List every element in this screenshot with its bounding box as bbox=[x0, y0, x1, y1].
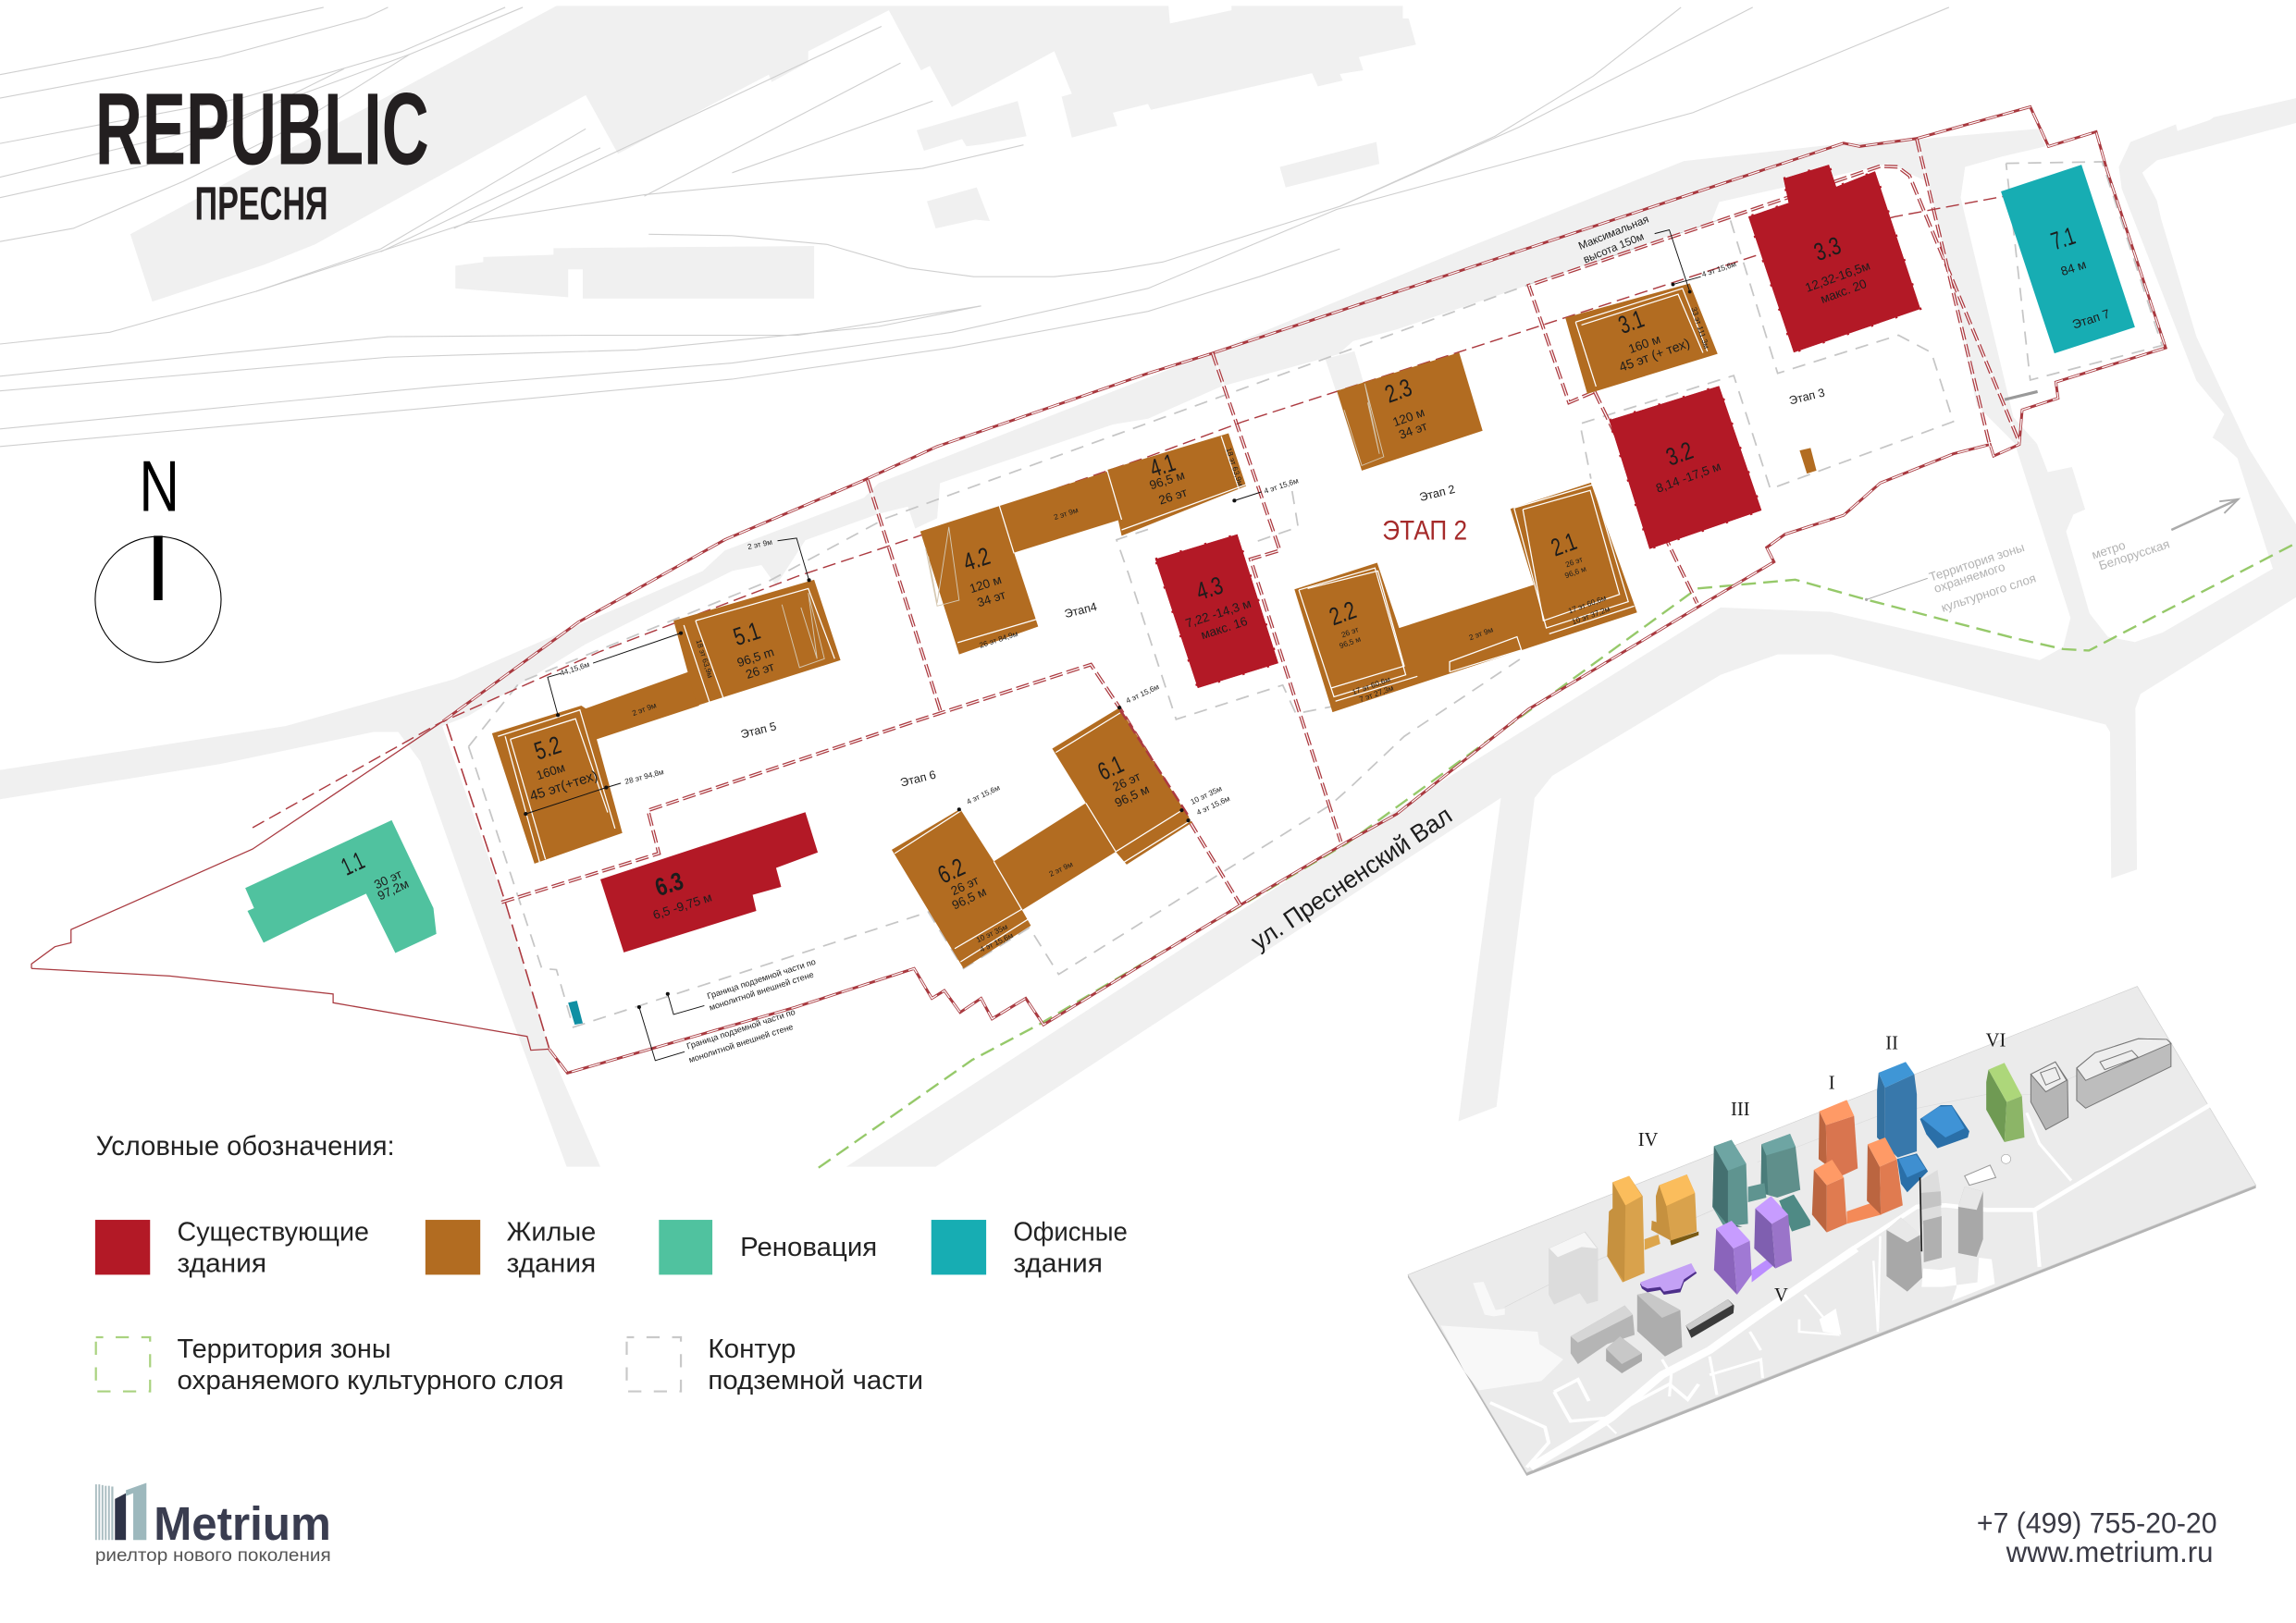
building 5.1: 18 эт 63,9м bbox=[694, 638, 714, 680]
building 3.3: 3.3 bbox=[1810, 231, 1845, 266]
dimension leaders and labels: Граница подземной части по bbox=[685, 1007, 796, 1051]
north compass: N bbox=[139, 447, 179, 526]
buildings 2.1 and 2.2 with connector: 2.1 bbox=[1548, 527, 1580, 562]
site boundary bbox=[31, 107, 2166, 1073]
building 5.2 with connector: 2 эт 9м bbox=[631, 701, 658, 718]
stage labels bbox=[739, 386, 1826, 790]
dimension leaders and labels: 4 эт 15,6м bbox=[1195, 794, 1231, 817]
stage labels: Этап4 bbox=[1063, 600, 1098, 621]
background: roads and surrounding buildings bbox=[0, 6, 2296, 1167]
building 3.3: 12,32-16,5м bbox=[1803, 259, 1872, 295]
legend: Реновация bbox=[740, 1233, 877, 1262]
dimension leaders and labels: монолитной внешней стене bbox=[708, 970, 815, 1013]
building 7.1 office: 84 м bbox=[2059, 257, 2088, 278]
building 4.2 with connector: 4.2 bbox=[960, 542, 994, 576]
railway lines bbox=[0, 7, 1949, 447]
model west part: roads and towers IV, III, I, V bbox=[1440, 1100, 1903, 1468]
dimension leaders and labels bbox=[524, 214, 1737, 1064]
buildings 2.1 and 2.2 with connector: 17 эт 60,6м bbox=[1567, 594, 1608, 615]
buildings 6.1 and 6.2 with connector: 10 эт 35м bbox=[975, 923, 1009, 944]
building 2.3: 2.3 bbox=[1381, 374, 1415, 409]
building 4.3: макс. 16 bbox=[1199, 614, 1249, 642]
building 3.2: 8,14 -17,5 м bbox=[1654, 459, 1722, 496]
dimension leaders and labels: высота 150м bbox=[1582, 230, 1646, 265]
stage division lines bbox=[253, 139, 2019, 904]
building 3.1: 45 эт (+ тех) bbox=[1617, 336, 1692, 375]
building 2.3: 34 эт bbox=[1397, 419, 1429, 442]
building 2.3 bbox=[1337, 352, 1483, 471]
logo: Metrium bbox=[95, 1483, 331, 1566]
buildings 6.1 and 6.2 with connector bbox=[892, 707, 1192, 968]
contact details: +7 (499) 755-20-20 bbox=[1977, 1506, 2217, 1539]
stage labels: Этап 6 bbox=[899, 768, 937, 790]
building 1.1: renovation: 30 эт bbox=[372, 867, 404, 891]
buildings 6.1 and 6.2 with connector: 96,5 м bbox=[950, 884, 988, 913]
model phase numerals bbox=[1638, 1030, 2006, 1306]
metro direction arrow bbox=[2090, 499, 2239, 572]
legend: Контур bbox=[708, 1334, 796, 1364]
building 7.1 office bbox=[2001, 165, 2135, 353]
building 3.1: 160 м bbox=[1626, 332, 1662, 356]
buildings 6.1 and 6.2 with connector: 4 эт 15,6м bbox=[979, 931, 1015, 954]
tower group III bbox=[1712, 1134, 1810, 1232]
building 3.2: 3.2 bbox=[1662, 436, 1697, 472]
stage labels: Этап 5 bbox=[739, 719, 778, 741]
logo: Republic Presnya: REPUBLIC bbox=[95, 72, 429, 186]
dimension leaders and labels: Максимальная bbox=[1576, 214, 1650, 252]
cultural layer annotation: культурного слоя bbox=[1940, 571, 2038, 615]
model phase numerals: I bbox=[1829, 1073, 1835, 1093]
building 3.1: 3.1 bbox=[1615, 305, 1648, 339]
building 4.2 with connector bbox=[920, 472, 1122, 655]
buildings 2.1 and 2.2 with connector: 7 эт 27,3м bbox=[1358, 683, 1395, 704]
dimension leaders and labels: 28 эт 94,8м bbox=[623, 768, 665, 786]
legend: подземной части bbox=[708, 1366, 923, 1396]
tower group V bbox=[1714, 1196, 1792, 1295]
dimension leaders and labels: 44,15,6м bbox=[559, 660, 591, 678]
tower group I bbox=[1812, 1100, 1903, 1233]
model phase numerals: IV bbox=[1638, 1130, 1659, 1150]
building 4.2 with connector: 26 эт 84,9м bbox=[979, 630, 1019, 650]
logo: Republic Presnya: ПРЕСНЯ bbox=[195, 177, 328, 229]
stage labels: Этап 2 bbox=[1418, 483, 1456, 504]
dimension leaders and labels: 4 эт 15,6м bbox=[966, 783, 1002, 806]
building 5.2 with connector bbox=[492, 672, 699, 864]
legend: Офисные bbox=[1013, 1217, 1128, 1247]
stage 2 heading: ЭТАП 2 bbox=[1382, 516, 1467, 547]
buildings 6.1 and 6.2 with connector: 6.2 bbox=[933, 853, 969, 889]
building 4.1: 26 эт bbox=[1157, 486, 1189, 508]
legend: здания bbox=[507, 1249, 596, 1279]
model east part: roads, tower II, VI and neighbours bbox=[1758, 1039, 2210, 1329]
dimension leaders and labels: 4 эт 15,6м bbox=[1125, 682, 1161, 706]
metro direction arrow: метро bbox=[2090, 538, 2127, 562]
buildings 2.1 and 2.2 with connector: 26 эт bbox=[1564, 555, 1584, 569]
stage labels: Этап 3 bbox=[1788, 386, 1826, 408]
model phase numerals: II bbox=[1885, 1034, 1898, 1054]
building 4.1: 18 эт 63,9м bbox=[1224, 447, 1244, 487]
dimension leaders and labels: Граница подземной части по bbox=[706, 957, 817, 1001]
dimension leaders and labels: монолитной внешней стене bbox=[687, 1022, 795, 1064]
buildings 6.1 and 6.2 with connector: 26 эт bbox=[1110, 769, 1142, 794]
buildings 2.1 and 2.2 with connector: 96,6 м bbox=[1563, 564, 1587, 580]
building 4.3: 4.3 bbox=[1192, 572, 1227, 606]
building 4.1: 4.1 bbox=[1146, 449, 1179, 483]
building 3.1 bbox=[1565, 283, 1718, 394]
legend: Территория зоны bbox=[178, 1334, 391, 1364]
logo: Metrium: риелтор нового поколения bbox=[95, 1545, 331, 1566]
building 3.1: 33 эт 111,3м bbox=[1689, 306, 1710, 350]
building 4.2 with connector: 34 эт bbox=[975, 587, 1007, 609]
building 7.1 office: Этап 7 bbox=[2070, 307, 2112, 332]
dimension leaders and labels: 10 эт 35м bbox=[1190, 784, 1224, 806]
building 3.2 bbox=[1610, 386, 1761, 549]
legend: здания bbox=[178, 1249, 266, 1279]
buildings 2.1 and 2.2 with connector: 26 эт bbox=[1340, 625, 1360, 639]
buildings 6.1 and 6.2 with connector: 26 эт bbox=[949, 873, 981, 898]
building 4.1: 96,5 м bbox=[1148, 468, 1187, 492]
building 2.3: 120 м bbox=[1391, 405, 1426, 429]
legend: Условные обозначения: bbox=[96, 1131, 395, 1162]
metro direction arrow: Белорусская bbox=[2097, 537, 2171, 572]
building 1.1: renovation bbox=[245, 820, 437, 953]
buildings 6.1 and 6.2 with connector: 2 эт 9м bbox=[1048, 860, 1074, 879]
logo: Metrium: Metrium bbox=[154, 1497, 331, 1550]
model phase numerals: III bbox=[1731, 1100, 1750, 1120]
north compass bbox=[95, 447, 221, 662]
street name: ул. Пресненский Вал bbox=[1246, 801, 1457, 955]
building 5.2 with connector: 5.2 bbox=[531, 731, 564, 766]
building 5.1: 26 эт bbox=[744, 659, 776, 682]
building 5.1 bbox=[673, 580, 841, 706]
buildings 6.1 and 6.2 with connector: 6.1 bbox=[1093, 750, 1128, 786]
model base bbox=[1408, 987, 2256, 1476]
legend: здания bbox=[1013, 1249, 1103, 1279]
model centre: low blue block and grey towers bbox=[1886, 1153, 2011, 1292]
legend: Существующие bbox=[178, 1217, 369, 1247]
tower group IV bbox=[1607, 1174, 1698, 1283]
buildings 2.1 and 2.2 with connector: 2.2 bbox=[1326, 596, 1360, 631]
buildings 2.1 and 2.2 with connector: 10 эт 37,2м bbox=[1571, 605, 1611, 626]
legend: Жилые bbox=[507, 1217, 596, 1247]
green dashed cultural layer boundary bbox=[819, 543, 2296, 1168]
cultural layer annotation bbox=[1865, 540, 2038, 615]
building 3.3 bbox=[1748, 165, 1920, 352]
building 6.3: 6.3 bbox=[651, 867, 686, 902]
building 4.2 with connector: 2 эт 9м bbox=[1053, 506, 1080, 522]
3D site model bbox=[1408, 987, 2256, 1476]
cultural layer annotation: охраняемого bbox=[1932, 559, 2006, 596]
building 3.3: макс. 20 bbox=[1819, 277, 1869, 306]
model phase numerals: VI bbox=[1986, 1030, 2006, 1051]
building 4.1 bbox=[1107, 434, 1246, 535]
cultural layer annotation: Территория зоны bbox=[1928, 540, 2026, 584]
buildings 6.1 and 6.2 with connector: 96,5 м bbox=[1113, 782, 1151, 810]
building 6.3: 6,5 -9,75 м bbox=[651, 891, 713, 922]
building 5.2 with connector: 160м bbox=[535, 760, 567, 782]
buildings 2.1 and 2.2 with connector: 2 эт 9м bbox=[1468, 625, 1495, 642]
building 7.1 office: 7.1 bbox=[2048, 222, 2079, 255]
contact details: www.metrium.ru bbox=[2006, 1535, 2214, 1568]
dimension leaders and labels: 4 эт 15,6м bbox=[1701, 260, 1737, 279]
buildings 2.1 and 2.2 with connector: 17 эт 60,6м bbox=[1352, 675, 1392, 696]
legend bbox=[95, 1131, 1128, 1396]
model phase numerals: V bbox=[1774, 1285, 1788, 1306]
building 6.3 bbox=[600, 812, 818, 953]
dimension leaders and labels: 2 эт 9м bbox=[747, 538, 773, 551]
legend: охраняемого культурного слоя bbox=[178, 1366, 563, 1396]
small technical blocks bbox=[568, 391, 2038, 1025]
buildings 2.1 and 2.2 with connector bbox=[1294, 483, 1637, 712]
building 1.1: renovation: 97,2м bbox=[376, 877, 411, 903]
building 4.3: 7,22 -14,3 м bbox=[1184, 596, 1253, 631]
building 4.3 bbox=[1155, 535, 1278, 688]
buildings 2.1 and 2.2 with connector: 96,5 м bbox=[1339, 634, 1363, 650]
grey dashed underground contour bbox=[469, 162, 2162, 1027]
building 5.1: 5.1 bbox=[730, 617, 763, 651]
building 5.2 with connector: 45 эт(+тех) bbox=[528, 768, 599, 805]
building 4.2 with connector: 120 м bbox=[968, 572, 1003, 596]
contact details bbox=[1977, 1506, 2217, 1568]
logo: Republic Presnya bbox=[95, 72, 429, 229]
building 1.1: renovation: 1.1 bbox=[337, 846, 369, 881]
building 5.1: 96,5 m bbox=[735, 645, 776, 670]
dimension leaders and labels: 4 эт 15,6м bbox=[1263, 476, 1300, 496]
